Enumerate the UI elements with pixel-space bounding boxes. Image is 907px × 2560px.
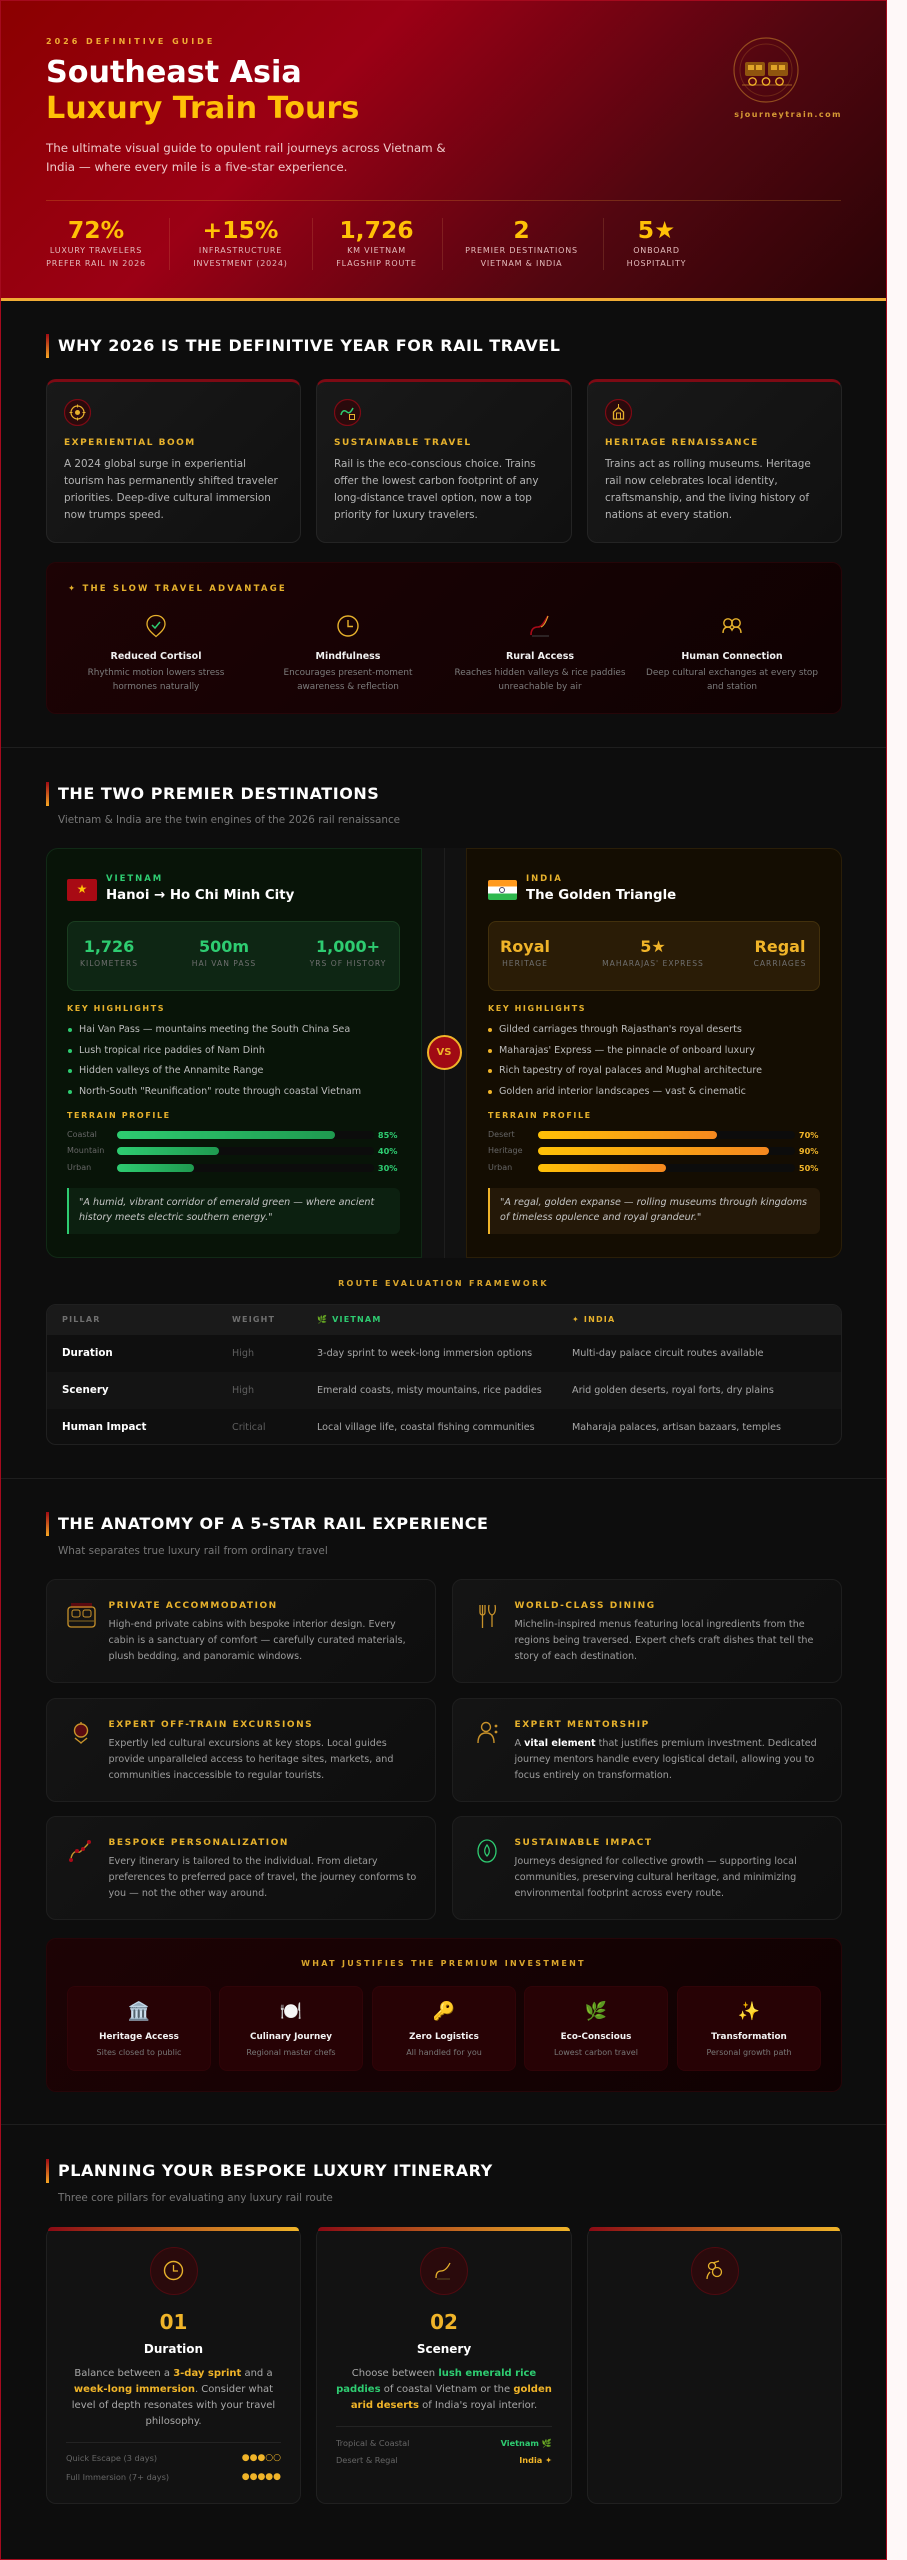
row: quick escape: Quick Escape (3 days) [66,2453,157,2463]
card: private accommodation: plush bedding, and panoramic windows. [108,1651,302,1662]
title [46,55,359,126]
pillar text: Balance between a 3-day sprint and a [74,2368,273,2379]
card: expert excursions: communities inaccessible to regular tourists. [108,1770,324,1781]
card text: priorities. Deep-dive cultural immersion [64,492,271,504]
eyebrow label: 2026 DEFINITIVE GUIDE [46,37,215,46]
heading: THE ANATOMY OF A 5-STAR RAIL EXPERIENCE [58,1514,488,1533]
panel: India [466,848,842,1258]
card: expert excursions: Expertly led cultural excursions at key stops. Local guides [108,1738,387,1749]
section: planning [0,2125,887,2558]
item: mindfulness: Encourages present-moment [283,668,413,678]
table header: ✦ INDIA [572,1315,615,1324]
subtitle: India — where every mile is a five-star experience. [46,160,347,174]
row: human impact: Local village life, coastal fishing communities [317,1422,535,1433]
item: human connection: Deep cultural exchanges at every stop [646,668,818,678]
comparison table [46,1304,842,1445]
stat: 5 star: HOSPITALITY [627,259,686,268]
title: Luxury Train Tours [46,91,359,126]
row: duration: High [232,1348,254,1359]
stat: 5 star: ONBOARD [633,246,680,255]
item: reduced cortisol: Reduced Cortisol [111,651,201,662]
item: heritage access [67,1986,211,2071]
card: human impact (empty) [587,2227,842,2504]
card text: Trains act as rolling museums. Heritage [605,458,811,470]
icon: fork and glass [477,1603,497,1629]
VS badge [426,1035,462,1070]
stat: +15%: INFRASTRUCTURE [199,246,282,255]
row: desert: India ✦ [519,2455,552,2465]
card: private accommodation [46,1579,436,1683]
pillar text [316,2366,572,2414]
highlights title: KEY HIGHLIGHTS [67,1004,165,1013]
card: expert mentorship: EXPERT MENTORSHIP [514,1720,650,1730]
terrain bars [67,1130,398,1173]
heading: PLANNING YOUR BESPOKE LUXURY ITINERARY [58,2161,493,2180]
item: zero logistics: All handled for you [406,2048,482,2057]
route name: Hanoi → Ho Chi Minh City [106,888,294,903]
terrain title: TERRAIN PROFILE [488,1111,592,1120]
flag: India [488,880,516,900]
terrain bars [488,1130,818,1173]
item: transformation: Transformation [711,2032,787,2042]
stat: years of history: YRS OF HISTORY [310,959,386,968]
card: expert mentorship: journey mentors handle every logistical detail, allowing you to [514,1754,814,1765]
row: scenery: Arid golden deserts, royal forts, dry plains [572,1385,774,1396]
icon: map pin [72,1721,90,1745]
item: transformation: ✨ [738,2001,760,2022]
pillar text: philosophy. [145,2416,202,2427]
item: mindfulness: awareness & reflection [297,682,399,692]
row: human impact: Critical [232,1422,266,1433]
stat: 5 star: 5★ [640,937,666,956]
hero header [0,0,887,301]
row: scenery: Scenery [62,1384,109,1396]
pillar text: level of depth resonates with your travel [72,2400,275,2411]
card: sustainable impact: communities, preserving cultural heritage, and minimizing [514,1872,796,1883]
terrain title: TERRAIN PROFILE [67,1111,171,1120]
panel: slow travel advantage [46,562,842,714]
terrain bars: 40% [378,1146,398,1156]
stat: Regal [754,937,806,968]
item: zero logistics: Zero Logistics [409,2032,479,2042]
stat: kilometers: KILOMETERS [80,959,138,968]
item: reduced cortisol: hormones naturally [113,682,199,692]
stats box [488,921,820,991]
stat: 72%: LUXURY TRAVELERS [50,246,142,255]
stat: 2: 2 [513,216,530,244]
item: heritage access: Heritage Access [99,2032,179,2042]
quote: "A regal, golden expanse — rolling museums through kingdoms [500,1197,807,1208]
card: world-class dining: WORLD-CLASS DINING [514,1601,656,1611]
terrain bars: Desert [488,1130,515,1139]
item: eco-conscious [524,1986,668,2071]
row: quick escape [66,2451,281,2465]
card text: now trumps speed. [64,509,164,521]
heading: THE TWO PREMIER DESTINATIONS [58,784,379,803]
terrain bars: 85% [378,1130,398,1140]
item: heritage access: Sites closed to public [97,2048,181,2057]
pillar text: arid deserts of India's royal interior. [351,2400,537,2411]
card: expert excursions: EXPERT OFF-TRAIN EXCURSIONS [108,1720,313,1730]
card: private accommodation: High-end private cabins with bespoke interior design. Every [108,1619,396,1630]
stat: 1,726: 1,726 [339,216,414,244]
card: bespoke personalization: you — not the other way around. [108,1888,267,1899]
row: duration: 3-day sprint to week-long immersion options [317,1348,532,1359]
card text: offer the lowest carbon footprint of any [334,475,539,487]
table header [47,1304,842,1335]
row: tropical: Vietnam 🌿 [501,2438,552,2448]
card: bespoke personalization: BESPOKE PERSONALIZATION [108,1838,289,1848]
highlights list: Hai Van Pass — mountains meeting the South China Sea [79,1024,350,1035]
card: world-class dining: story of each destination. [514,1651,637,1662]
terrain bars: Urban [488,1163,512,1172]
panel: Vietnam [46,848,422,1258]
pillar text [46,2366,301,2430]
icon: cabin [66,1603,96,1628]
stat: 72%: PREFER RAIL IN 2026 [46,259,146,268]
icon: clock [150,2247,198,2295]
highlights list: Lush tropical rice paddies of Nam Dinh [79,1045,265,1056]
item: zero logistics: 🔑 [433,2001,455,2022]
item: culinary journey [219,1986,363,2071]
card: world-class dining: regions being traversed. Expert chefs craft dishes that tell the [514,1635,813,1646]
VS badge: VS [437,1047,451,1058]
website label: sjourneytrain.com [734,110,842,119]
stat: Hai Van Pass [192,937,256,968]
card: bespoke personalization: preferences to preferred pace of travel, the journey conforms to [108,1872,416,1883]
item: rural access: unreachable by air [498,682,582,692]
item: rural access: Rural Access [506,651,574,662]
section: two destinations [46,782,842,1445]
table header: 🌿 VIETNAM [317,1315,381,1324]
heading: WHY 2026 IS THE DEFINITIVE YEAR FOR RAIL TRAVEL [58,336,560,355]
table header: PILLAR [62,1315,101,1324]
stat: 2: VIETNAM & INDIA [481,259,562,268]
item: culinary journey: 🍽️ [280,2001,302,2022]
card: experiential boom [46,379,301,543]
row: duration: Duration [62,1347,113,1359]
icon: people [722,618,742,633]
stat: 72% [46,216,146,268]
row: tropical [336,2436,552,2450]
stat: 1,726: KM VIETNAM [347,246,406,255]
subtitle [46,140,446,174]
item: heritage access: 🏛️ [128,2001,150,2022]
stat: +15% [193,216,288,268]
stat: kilometers [80,937,138,968]
card text [334,458,539,521]
panel title: WHAT JUSTIFIES THE PREMIUM INVESTMENT [301,1959,586,1968]
icon: mentor [477,1721,499,1745]
row: human impact: Human Impact [62,1421,146,1433]
card text: priority for luxury travelers. [334,509,478,521]
item: reduced cortisol [88,614,224,692]
row: full immersion: ●●●●● [242,2472,281,2482]
card text [604,458,811,521]
terrain bars: 30% [378,1163,398,1173]
row: human impact: Maharaja palaces, artisan bazaars, temples [572,1422,781,1433]
icon: train logo [733,37,799,103]
flag: Vietnam: ★ [77,882,87,896]
number: 02 [430,2310,458,2334]
icon: temple [605,399,632,426]
stat: 5 star: 5★ [638,216,675,244]
card text: Rail is the eco-conscious choice. Trains [334,458,536,470]
row: duration [62,1347,764,1359]
quote: "A humid, vibrant corridor of emerald green — where ancient [79,1197,374,1208]
quote [488,1188,820,1234]
stat: 1,726 [336,216,417,268]
pillar name: Duration [144,2342,203,2356]
section: anatomy [46,1512,842,2092]
card: duration [46,2227,301,2504]
terrain bars: Coastal [67,1130,97,1139]
route name: The Golden Triangle [526,888,676,903]
stat: 5 star: MAHARAJAS' EXPRESS [602,959,704,968]
card text: tourism has permanently shifted traveler [64,475,278,487]
row: tropical: Tropical & Coastal [336,2438,409,2448]
quote [67,1188,400,1234]
icon: leaf circle [477,1839,497,1863]
card: sustainable impact: environmental footprint across every route. [514,1888,724,1899]
item: mindfulness [283,615,413,692]
terrain bars: Mountain [67,1146,104,1155]
stat: 2 [465,216,578,268]
row: duration: Multi-day palace circuit routes available [572,1348,764,1359]
highlights list [488,1024,762,1097]
card: bespoke personalization: Every itinerary is tailored to the individual. From dietary [108,1856,378,1867]
row: full immersion [66,2470,281,2484]
stat: Royal: Royal [500,937,550,956]
card text: long-distance travel option, now a top [334,492,532,504]
item: zero logistics [372,1986,516,2071]
pillar name: Scenery [417,2342,471,2356]
item: human connection: and station [707,682,757,692]
highlights list: Rich tapestry of royal palaces and Mughal architecture [499,1065,762,1076]
card: sustainable impact: SUSTAINABLE IMPACT [514,1838,653,1848]
stat: 1,726: FLAGSHIP ROUTE [336,259,417,268]
country label: VIETNAM [106,874,163,884]
card: scenery [316,2227,572,2504]
number: 01 [160,2310,187,2334]
stat: years of history [310,937,386,968]
terrain bars: 50% [799,1163,818,1173]
item: eco-conscious: Lowest carbon travel [554,2048,638,2057]
section: why 2026 [46,334,842,714]
card title: EXPERIENTIAL BOOM [64,438,196,448]
row: scenery: High [232,1385,254,1396]
row: desert: Desert & Regal [336,2455,398,2465]
item: eco-conscious: 🌿 [585,2001,607,2022]
card: world-class dining: Michelin-inspired menus featuring local ingredients from the [514,1619,805,1630]
card text: rail now celebrates local identity, [605,475,778,487]
highlights title: KEY HIGHLIGHTS [488,1004,586,1013]
section subtitle: Three core pillars for evaluating any luxury rail route [58,2192,333,2204]
card title: SUSTAINABLE TRAVEL [334,438,472,448]
terrain bars: 70% [799,1130,818,1140]
card: private accommodation: PRIVATE ACCOMMODATION [108,1601,278,1611]
terrain bars: Heritage [488,1146,522,1155]
title: Southeast Asia [46,55,302,90]
stat: 2: PREMIER DESTINATIONS [465,246,578,255]
icon: people [690,2247,738,2295]
card text: craftsmanship, and the living history of [605,492,809,504]
panel title: ✦ THE SLOW TRAVEL ADVANTAGE [68,584,287,594]
card text: nations at every station. [605,509,732,521]
flag: Vietnam [67,879,97,900]
item: human connection [646,618,818,692]
item: human connection: Human Connection [681,651,783,662]
quote: of timeless opulence and royal grandeur." [500,1212,701,1223]
card: expert mentorship [452,1698,842,1802]
icon: clock [337,615,359,637]
row: desert [336,2453,552,2467]
item: rural access: Reaches hidden valleys & rice paddies [454,668,626,678]
item: culinary journey: Regional master chefs [246,2048,336,2057]
subtitle: The ultimate visual guide to opulent rail journeys across Vietnam & [46,140,446,154]
item: transformation [677,1986,821,2071]
card: sustainable impact: Journeys designed for collective growth — supporting local [514,1856,797,1867]
table title: ROUTE EVALUATION FRAMEWORK [338,1279,549,1288]
country label: INDIA [526,874,563,884]
highlights list: North-South "Reunification" route through coastal Vietnam [79,1086,361,1097]
card: world-class dining [452,1579,842,1683]
quote: history meets electric southern energy." [79,1212,273,1223]
row: scenery [47,1372,842,1409]
stat: +15%: INVESTMENT (2024) [193,259,288,268]
card: expert excursions: provide unparalleled access to heritage sites, markets, and [108,1754,393,1765]
highlights list: Maharajas' Express — the pinnacle of onboard luxury [499,1045,755,1056]
item: mindfulness: Mindfulness [316,651,380,662]
card text: A 2024 global surge in experiential [64,458,246,470]
highlights list: Hidden valleys of the Annamite Range [79,1065,263,1076]
card title: HERITAGE RENAISSANCE [605,438,759,448]
stat: Royal: HERITAGE [502,959,548,968]
pillar text: Choose between lush emerald rice [352,2368,536,2379]
item: reduced cortisol: Rhythmic motion lowers stress [88,668,224,678]
icon: winding road [530,616,549,636]
icon: route [420,2247,468,2295]
item: eco-conscious: Eco-Conscious [561,2032,631,2042]
card: private accommodation: cabin is a sanctuary of comfort — carefully curated materials, [108,1635,406,1646]
terrain bars: 90% [799,1146,818,1156]
item: culinary journey: Culinary Journey [250,2032,332,2042]
card: sustainable impact [452,1816,842,1920]
row: full immersion: Full Immersion (7+ days) [66,2472,169,2482]
heading [46,2159,746,2183]
stat: kilometers: 1,726 [84,937,134,956]
row: quick escape: ●●●○○ [242,2453,281,2463]
terrain bars: Urban [67,1163,91,1172]
icon: compass [64,399,91,426]
card: bespoke personalization [46,1816,436,1920]
row: human impact [62,1421,781,1433]
pillar text: week-long immersion. Consider what [74,2384,273,2395]
card: sustainable travel [316,379,572,543]
card text [64,458,278,521]
stat: Royal [500,937,550,968]
stat: 5 star [627,216,686,268]
card: heritage renaissance [587,379,842,543]
icon: route [68,1839,92,1863]
stat: Hai Van Pass: 500m [199,937,249,956]
item: transformation: Personal growth path [706,2048,792,2057]
stat: years of history: 1,000+ [316,937,380,956]
card: expert mentorship: A vital element that justifies premium investment. Dedicated [514,1738,817,1749]
item: rural access [454,616,626,692]
section subtitle: What separates true luxury rail from ordinary travel [58,1545,328,1557]
stat: Regal: CARRIAGES [754,959,806,968]
stat: +15%: +15% [203,216,278,244]
stat: 5 star [602,937,704,968]
highlights list: Golden arid interior landscapes — vast & cinematic [499,1086,746,1097]
icon: shield check [146,614,166,638]
highlights list [68,1024,361,1097]
VS divider column [422,848,466,1258]
card: expert mentorship: focus entirely on transformation. [514,1770,672,1781]
highlights list: Gilded carriages through Rajasthan's royal deserts [499,1024,742,1035]
stats box [67,921,400,991]
row: scenery: Emerald coasts, misty mountains, rice paddies [317,1385,542,1396]
panel: premium investment [46,1938,842,2092]
section subtitle: Vietnam & India are the twin engines of the 2026 rail renaissance [58,814,400,826]
stat: Hai Van Pass: HAI VAN PASS [192,959,256,968]
table header: WEIGHT [232,1315,275,1324]
icon: green route [334,399,361,426]
pillar text: paddies of coastal Vietnam or the golden [336,2384,552,2395]
stat: 72%: 72% [68,216,124,244]
stat: Regal: Regal [755,937,805,956]
card: expert excursions [46,1698,436,1802]
